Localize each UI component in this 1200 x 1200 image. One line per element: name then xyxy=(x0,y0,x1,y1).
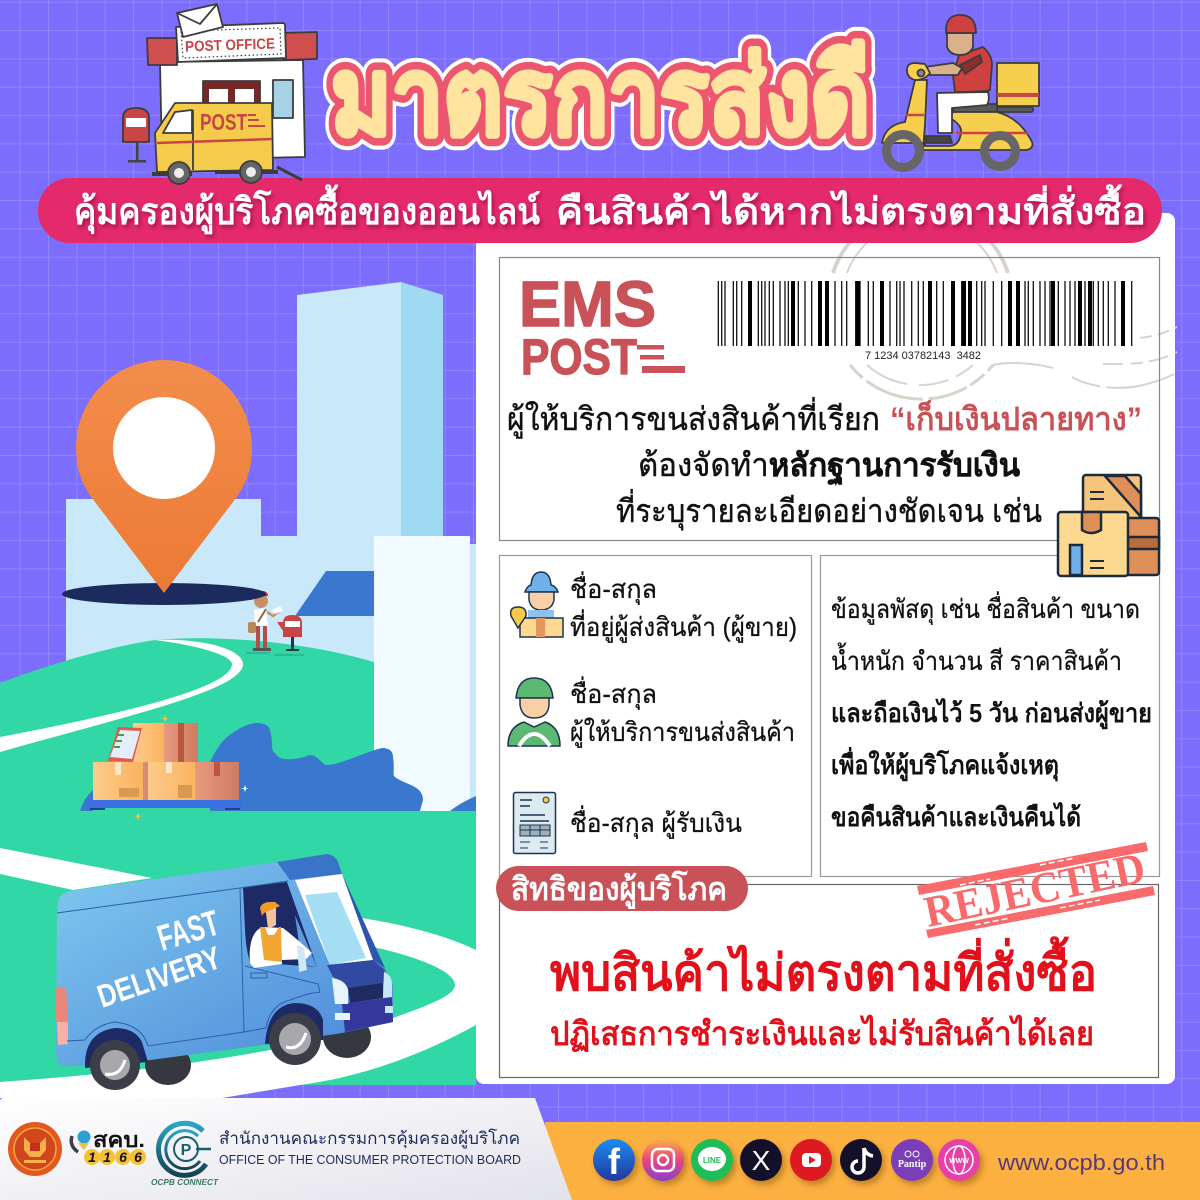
social icons xyxy=(593,1139,980,1182)
icon: X xyxy=(740,1139,782,1181)
agency name English: OFFICE OF THE CONSUMER PROTECTION BOARD xyxy=(219,1152,521,1167)
icon: X: X xyxy=(752,1145,771,1176)
highlighted phrase: “เก็บเงินปลายทาง” xyxy=(890,399,1142,437)
parcel info line 4: เพื่อให้ผู้บริโภคแจ้งเหตุ xyxy=(831,746,1059,782)
recipient text: ชื่อ-สกุล ผู้รับเงิน xyxy=(570,805,742,839)
icon: tiktok xyxy=(840,1139,882,1181)
icon: pantip: Pantip xyxy=(898,1159,927,1170)
van front wheel xyxy=(265,1003,323,1065)
icon: sender with parcel xyxy=(511,572,563,637)
van lettering xyxy=(93,902,225,1015)
tall building xyxy=(297,282,443,540)
title: มาตรการส่งดี xyxy=(331,36,870,157)
rejected stamp: REJECTED xyxy=(920,843,1149,937)
barcode number: 7 1234 03782143 3482 xyxy=(865,350,981,362)
icon: youtube xyxy=(790,1139,832,1181)
OCPB logo xyxy=(151,1123,219,1187)
van lettering: FAST xyxy=(153,902,224,959)
agency name Thai: สำนักงานคณะกรรมการคุ้มครองผู้บริโภค xyxy=(219,1128,520,1149)
footer agency panel xyxy=(0,1098,572,1200)
icon: stacked parcels xyxy=(1058,475,1159,576)
banner text: คืนสินค้าได้หากไม่ตรงตามที่สั่งซื้อ xyxy=(556,184,1146,232)
blue bushes xyxy=(80,723,476,811)
icon: receipt xyxy=(514,792,556,854)
icon: line: LINE xyxy=(703,1156,722,1165)
icon: instagram xyxy=(642,1139,684,1181)
hotline logo: สคบ. xyxy=(93,1129,145,1152)
icon: post office with van: POST OFFICE xyxy=(185,35,275,56)
illustration: city and delivery scene xyxy=(0,282,476,1098)
headline line 1: ผู้ให้บริการขนส่งสินค้าที่เรียก xyxy=(507,397,880,439)
red warning headline: พบสินค้าไม่ตรงตามที่สั่งซื้อ xyxy=(550,936,1097,1001)
box: parcel information xyxy=(820,556,1160,876)
mailbox xyxy=(123,108,149,162)
parcel info line 5: ขอคืนสินค้าและเงินคืนได้ xyxy=(831,801,1081,832)
hotline logo: 1 xyxy=(88,1149,96,1165)
hotline logo: 6 xyxy=(134,1149,142,1165)
box: EMS label and headline xyxy=(500,258,1160,540)
box: names list xyxy=(500,556,812,876)
parcel info line 3: และถือเงินไว้ 5 วัน ก่อนส่งผู้ขาย xyxy=(831,697,1152,730)
pale front building xyxy=(374,536,476,811)
driver role text: ผู้ให้บริการขนส่งสินค้า xyxy=(570,717,795,748)
OCPB logo: P xyxy=(181,1142,192,1159)
low building xyxy=(66,499,374,700)
title: มาตรการส่งดี xyxy=(331,36,870,157)
icon: pantip xyxy=(891,1139,933,1181)
EMS POST logo: POST xyxy=(521,329,637,385)
EMS POST logo xyxy=(519,268,685,385)
icon: post office with van: POST xyxy=(200,109,247,135)
driver name text: ชื่อ-สกุล xyxy=(570,676,657,710)
parcel info line 1: ข้อมูลพัสดุ เช่น ชื่อสินค้า ขนาด xyxy=(831,591,1140,625)
banner text: คุ้มครองผู้บริโภคซื้อของออนไลน์ xyxy=(74,184,540,235)
website: www.ocpb.go.th xyxy=(997,1150,1165,1175)
OCPB logo: OCPB CONNECT xyxy=(151,1177,219,1187)
lower white road xyxy=(0,848,476,1098)
stack of parcels on pallet xyxy=(87,715,249,820)
EMS POST logo: EMS xyxy=(519,268,656,340)
title: มาตรการส่งดี xyxy=(331,36,870,157)
icon: line xyxy=(691,1139,733,1181)
banner text xyxy=(74,184,1146,235)
box: consumer rights xyxy=(496,842,1158,1078)
white content panel xyxy=(476,213,1175,1084)
hotline logo xyxy=(71,1129,146,1165)
red warning subline: ปฏิเสธการชำระเงินและไม่รับสินค้าได้เลย xyxy=(550,1014,1094,1052)
icon: driver xyxy=(508,678,560,746)
map pin xyxy=(62,360,266,605)
hotline logo: 1 xyxy=(103,1149,111,1165)
van rear wheel xyxy=(85,1028,148,1090)
rights pill heading: สิทธิของผู้บริโภค xyxy=(511,870,727,910)
banner xyxy=(38,178,1162,243)
sender address text: ที่อยู่ผู้ส่งสินค้า (ผู้ขาย) xyxy=(570,609,797,643)
headline line 3: ที่ระบุรายละเอียดอย่างชัดเจน เช่น xyxy=(616,489,1042,531)
delivery van xyxy=(56,854,393,1090)
green hill xyxy=(0,638,476,1098)
icon: www globe xyxy=(938,1139,980,1181)
barcode xyxy=(718,281,1132,346)
footer xyxy=(0,1098,1200,1200)
blue roof xyxy=(295,571,374,616)
emblem xyxy=(8,1122,62,1176)
postman with mailbox xyxy=(246,591,304,655)
sender name text: ชื่อ-สกุล xyxy=(570,571,657,605)
hotline logo: 6 xyxy=(119,1149,127,1165)
icon: post office with van xyxy=(123,4,317,184)
icon: facebook xyxy=(593,1139,635,1182)
van lettering: DELIVERY xyxy=(93,939,225,1015)
postmark stamp marks xyxy=(833,209,1177,399)
icon: delivery scooter xyxy=(882,15,1039,168)
parcel info line 2: น้ำหนัก จำนวน สี ราคาสินค้า xyxy=(831,642,1122,676)
headline line 2: ต้องจัดทำหลักฐานการรับเงิน xyxy=(638,447,1020,486)
icon: www globe: WWW xyxy=(949,1158,969,1165)
footer orange strip xyxy=(545,1122,1200,1200)
icon: facebook: f xyxy=(608,1141,621,1182)
upper white road xyxy=(0,640,243,752)
